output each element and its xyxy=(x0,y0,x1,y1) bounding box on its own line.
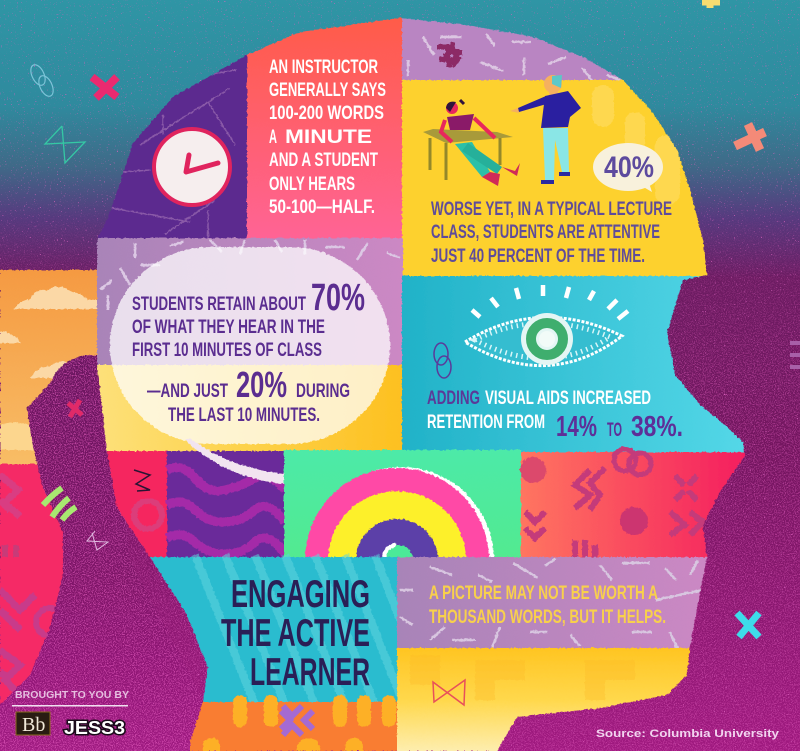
panel: coral words panel xyxy=(247,15,403,239)
words per minute text: 100-200 WORDS xyxy=(269,102,384,124)
words per minute text: ONLY HEARS xyxy=(269,173,355,195)
panel: clock background xyxy=(98,54,248,239)
panel: coral pattern right xyxy=(520,449,751,558)
icon: pink cross top-left xyxy=(92,77,117,98)
40% speech bubble: 40% xyxy=(604,151,654,184)
visual aids text: ADDING xyxy=(427,388,480,409)
words per minute text: A xyxy=(269,126,277,148)
picture caption text: A PICTURE MAY NOT BE WORTH A xyxy=(429,583,658,604)
retention text first 10 minutes: OF WHAT THEY HEAR IN THE xyxy=(132,317,325,338)
attentive text: CLASS, STUDENTS ARE ATTENTIVE xyxy=(431,222,660,243)
illustration: teacher pointing xyxy=(510,75,581,184)
visual aids text: VISUAL AIDS INCREASED xyxy=(485,388,651,409)
dense speckle on the lower area xyxy=(0,214,800,751)
left purple neck blob xyxy=(0,355,230,751)
title: THE ACTIVE xyxy=(221,612,370,655)
icon: green stripes xyxy=(43,488,76,520)
panel: cyan title background xyxy=(140,555,400,705)
icon: yellow cross top right xyxy=(702,0,720,8)
logo: JESS3: JESS3 xyxy=(64,718,125,738)
blob speckle xyxy=(0,355,215,751)
illustration: bored student at desk xyxy=(423,100,520,186)
attentive text: JUST 40 PERCENT OF THE TIME. xyxy=(431,246,645,267)
retention text last 10 minutes: 20% xyxy=(236,364,287,405)
picture caption text: THOUSAND WORDS, BUT IT HELPS. xyxy=(429,607,666,628)
icon: small scribble in pink panel xyxy=(134,470,150,491)
icon: orange panel cross xyxy=(281,706,313,735)
icon: salmon cross right xyxy=(735,124,765,150)
panel: purple waves xyxy=(167,451,285,558)
title xyxy=(221,573,370,694)
visual aids text: 14% xyxy=(556,411,597,443)
retention text first 10 minutes: STUDENTS RETAIN ABOUT xyxy=(132,294,306,315)
icon: white zigzag doodle xyxy=(87,531,108,550)
panel: yellow lecture panel xyxy=(402,80,712,277)
panel: lavender behind bubble xyxy=(90,238,403,366)
logo: Blackboard xyxy=(16,712,50,736)
panel: left pink pattern xyxy=(0,464,120,751)
icon: right edge stripes xyxy=(790,343,800,367)
panel: pink pattern xyxy=(100,451,168,558)
title: LEARNER xyxy=(250,651,370,694)
words per minute text: AN INSTRUCTOR xyxy=(269,56,378,78)
retention text first 10 minutes: 70% xyxy=(311,277,365,319)
icon: eye xyxy=(465,285,628,366)
icon: red bow doodle xyxy=(433,680,465,705)
visual aids text xyxy=(427,388,683,443)
panel: top lavender xyxy=(402,15,707,81)
visual aids text: 38%. xyxy=(631,411,683,443)
panel: lavender picture caption xyxy=(397,557,712,650)
panel: yellow bottom xyxy=(397,648,697,751)
icon: cyan cross lower right xyxy=(737,613,759,637)
attentive text: WORSE YET, IN A TYPICAL LECTURE xyxy=(431,199,672,220)
speech bubble xyxy=(110,247,390,484)
icon: clock xyxy=(154,129,230,205)
icon: green zigzag doodle xyxy=(45,126,85,163)
title: ENGAGING xyxy=(231,573,370,616)
visual aids text: TO xyxy=(607,420,622,441)
panel: orange sky with clouds xyxy=(0,270,110,465)
logo: Blackboard: Bb xyxy=(22,714,45,736)
words per minute text: 50-100—HALF. xyxy=(269,196,375,218)
words per minute text xyxy=(269,56,386,218)
visual aids text: RETENTION FROM xyxy=(427,412,545,433)
brought to you by label xyxy=(12,689,129,706)
icon: chain link doodle xyxy=(434,343,451,378)
panel: cyan visual aids xyxy=(402,276,752,453)
icon: chain doodle top-left xyxy=(28,62,56,99)
words per minute text: AND A STUDENT xyxy=(269,149,378,171)
retention text last 10 minutes: THE LAST 10 MINUTES. xyxy=(168,405,320,426)
panel: orange pills xyxy=(190,695,398,751)
panel: rainbow xyxy=(283,449,522,558)
40% speech bubble xyxy=(593,143,663,192)
panel: lower yellow xyxy=(90,365,403,452)
retention text last 10 minutes xyxy=(147,364,350,426)
retention text first 10 minutes: FIRST 10 MINUTES OF CLASS xyxy=(132,340,322,361)
words per minute text: GENERALLY SAYS xyxy=(269,79,386,101)
attentive text xyxy=(431,199,672,267)
picture caption text xyxy=(429,583,666,628)
source credit: Source: Columbia University xyxy=(596,728,780,740)
retention text first 10 minutes xyxy=(132,277,365,361)
retention text last 10 minutes: DURING xyxy=(296,381,350,402)
brought to you by label: BROUGHT TO YOU BY xyxy=(15,689,129,701)
retention text last 10 minutes: —AND JUST xyxy=(147,381,228,402)
words per minute text: MINUTE xyxy=(285,126,372,148)
icon: pink cross on neck xyxy=(68,400,82,417)
